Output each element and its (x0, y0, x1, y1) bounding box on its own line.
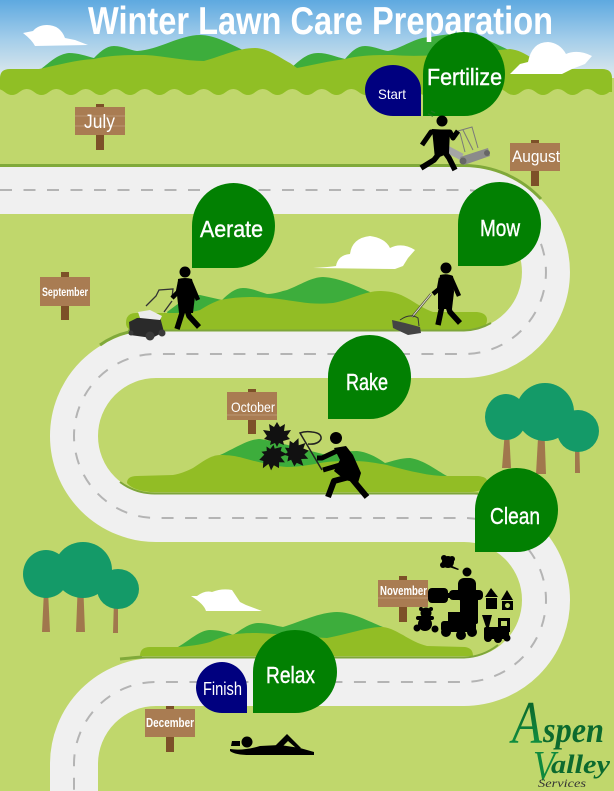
bubble: Start: Start (378, 86, 406, 102)
logo: Aspen Valley Services: Services (538, 776, 586, 790)
cloud: middle (313, 236, 415, 269)
figure: relaxing person lying down (230, 734, 314, 755)
sign: July: July (84, 112, 115, 133)
bubble: Start (365, 65, 421, 116)
sign: November: November (380, 583, 427, 598)
bubble: Rake: Rake (346, 369, 388, 395)
bubble: Fertilize: Fertilize (427, 64, 502, 90)
sign: December (145, 706, 195, 752)
sign: November (378, 576, 428, 622)
bubble: Fertilize (423, 32, 505, 116)
sign: August (510, 140, 560, 186)
sign: October: October (231, 399, 275, 415)
sign: October (227, 389, 277, 434)
bubble: Relax (253, 630, 337, 713)
logo: Aspen Valley Services (509, 690, 611, 790)
logo: Aspen Valley Services: alley (551, 750, 611, 779)
figure: aerating person with mower (128, 266, 199, 340)
trees: upper right (485, 383, 599, 474)
cloud: top right (510, 42, 592, 74)
hills: September to August panel (126, 277, 491, 330)
bubble: Mow: Mow (480, 215, 520, 241)
bubble: Finish (196, 662, 247, 713)
logo: Aspen Valley Services: spen (542, 710, 604, 750)
logo: Aspen Valley Services: A (509, 690, 542, 756)
bubble: Finish: Finish (203, 679, 242, 699)
sign: August: August (512, 147, 560, 166)
bubble: Aerate: Aerate (200, 216, 263, 242)
cloud: lower (191, 589, 262, 611)
top back hills (41, 34, 530, 70)
sign: September (40, 272, 90, 320)
hills: October panel (120, 439, 487, 494)
bubble: Clean: Clean (490, 503, 540, 529)
bubble: Relax: Relax (266, 662, 315, 688)
bubble: Mow (458, 182, 541, 266)
road (0, 166, 546, 791)
figure: cleaning person with toys (414, 555, 513, 643)
sign: September: September (42, 285, 88, 299)
sign: December: December (146, 715, 194, 730)
hills: November to December panel (140, 612, 498, 658)
top front hills with scalloped edge (0, 48, 612, 95)
figure: raking person with leaves (254, 422, 367, 497)
background: sky (0, 0, 614, 78)
trees: lower left (23, 542, 139, 633)
bubble: Rake (328, 335, 411, 419)
bubble: Aerate (192, 183, 275, 268)
bubble: Clean (475, 468, 558, 552)
logo: Aspen Valley Services: V (533, 744, 559, 790)
sign: July (75, 104, 125, 150)
cloud: top left (23, 25, 88, 46)
figure: fertilizing person with spreader (421, 111, 490, 170)
figure: mowing person with reel mower (392, 262, 460, 335)
